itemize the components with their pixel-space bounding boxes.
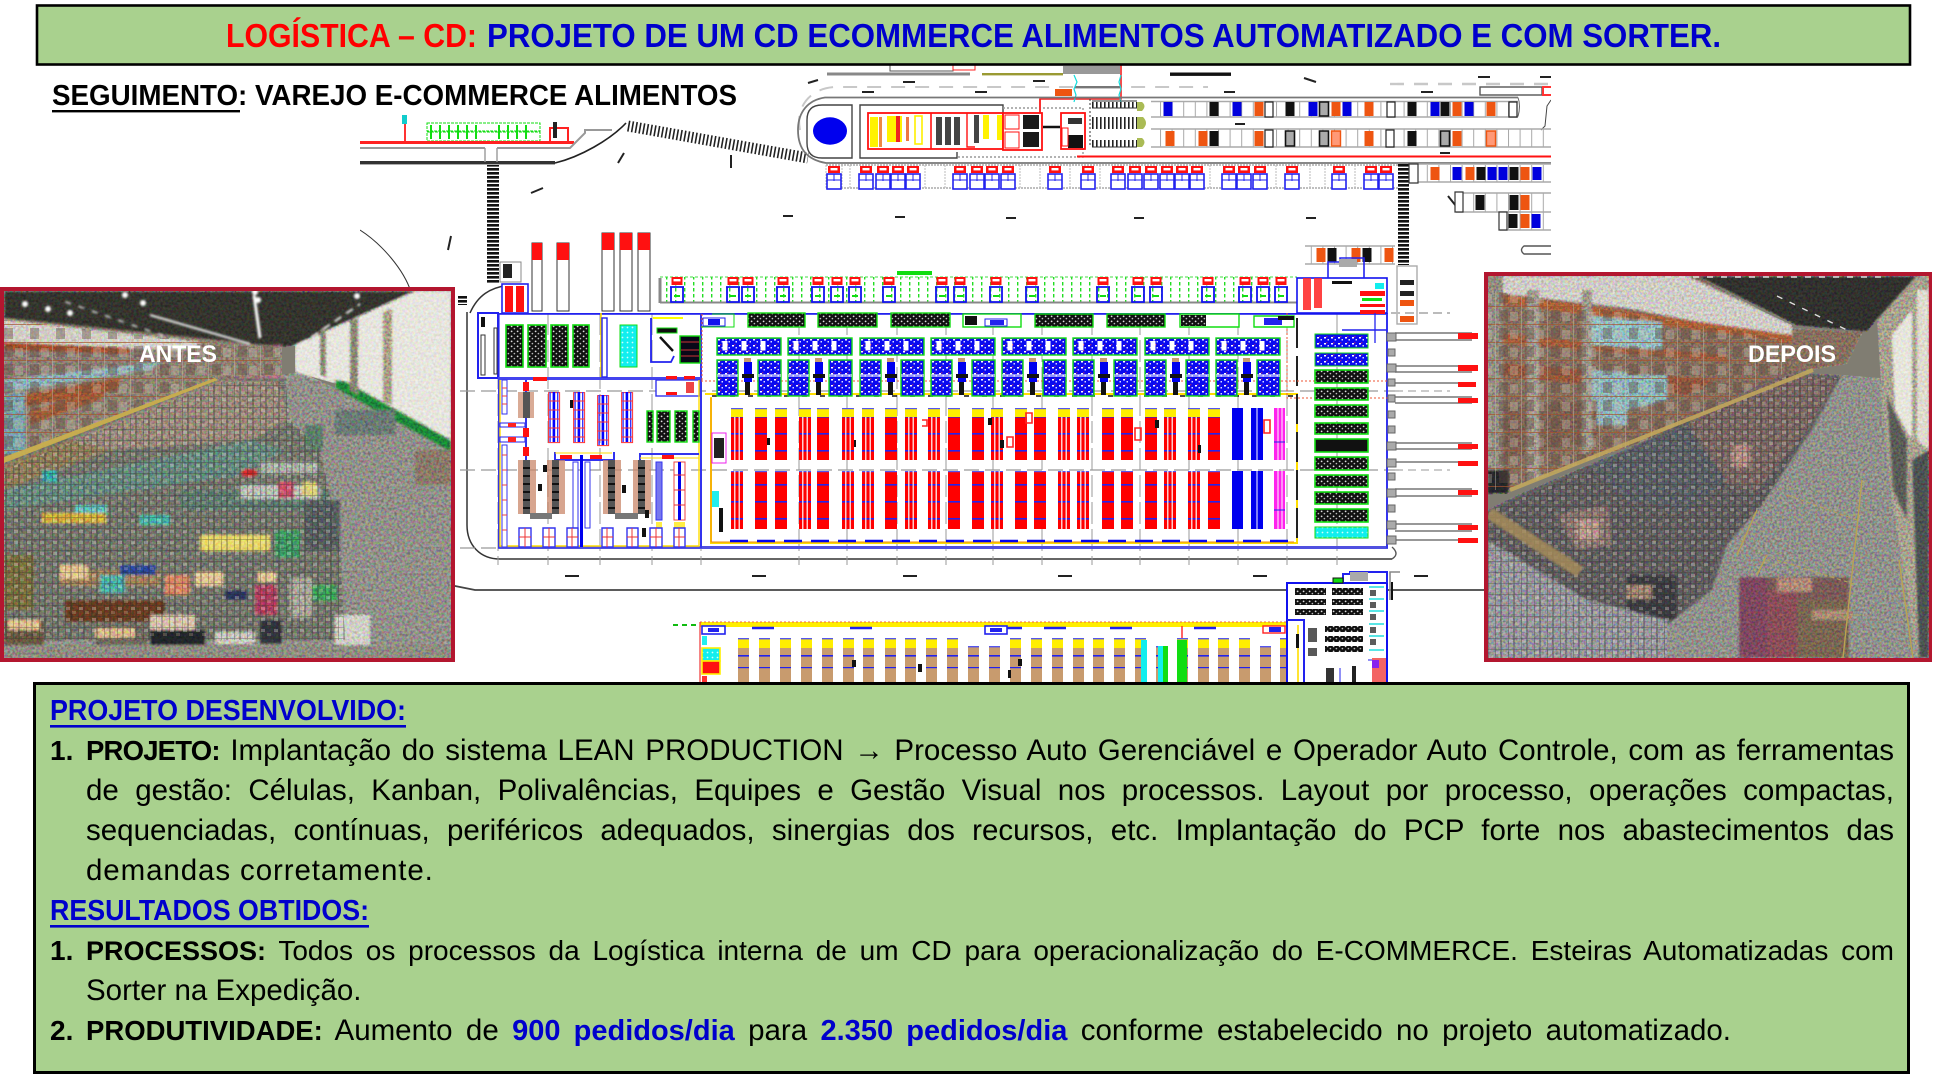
- magenta pallet rack: [1274, 408, 1285, 529]
- photo: depois (after): [1486, 274, 1930, 660]
- label: antes: ANTES: [139, 341, 217, 368]
- title banner: PROJETO DE UM CD ECOMMERCE ALIMENTOS AUTOMATIZADO E COM SORTER.: [487, 17, 1721, 54]
- lower dock units with red caps: [826, 165, 1398, 189]
- blue pallet racks: [1232, 408, 1263, 529]
- item: projeto line 3: sequenciadas, contínuas, periféricos adequados, sinergias dos recursos, etc. Implantação do PCP forte nos abastecimentos das: [86, 814, 1894, 847]
- inbound dock doors above building: [458, 233, 650, 313]
- lower warehouse racks: [673, 622, 1291, 683]
- yellow lane: [4, 378, 218, 463]
- racks: [1487, 276, 1863, 496]
- floor plan drawing: [360, 65, 1552, 683]
- carts mass: [4, 378, 345, 640]
- top-left storage section: [498, 313, 701, 396]
- U-shaped sorter cells: [518, 460, 651, 519]
- pink stock at back: [218, 343, 284, 380]
- blue flow racks row B: [717, 358, 1280, 396]
- structural grid lines: [460, 391, 1400, 548]
- title banner: [37, 6, 1910, 64]
- ceiling: [1697, 276, 1917, 332]
- ceiling: [4, 291, 415, 348]
- item: processos line 1: PROCESSOS: Todos os processos da Logística interna de um CD para operacionalização do E-COMMERCE. Esteiras Automatizadas com: [86, 935, 1894, 966]
- hatched ramps: [360, 126, 1409, 292]
- list number 1 results: 1.: [50, 935, 73, 966]
- list number 2 results: 2.: [50, 1015, 73, 1046]
- right side dock lanes: [1387, 333, 1478, 544]
- left receiving strip: [360, 115, 626, 164]
- left racks: [4, 318, 282, 458]
- top black storage blocks: [701, 313, 1294, 327]
- segment heading: SEGUIMENTO: VAREJO E-COMMERCE ALIMENTOS: [52, 80, 737, 112]
- upper right office and service block: [1297, 258, 1450, 343]
- rack and cart texture: [4, 320, 280, 458]
- right hand storage blocks: [1315, 334, 1368, 538]
- upper yard and expedition building: [360, 65, 1552, 292]
- green dashed docks with units: [660, 271, 1297, 303]
- yard dashed lane: [799, 65, 1552, 130]
- main building structure: [450, 285, 1490, 590]
- pallets: [1766, 576, 1850, 602]
- item: projeto line 4: demandas corretamente.: [86, 854, 434, 887]
- sorter line block: [868, 113, 1085, 150]
- right parked trucks: [1305, 164, 1551, 264]
- yellow lanes: [1510, 370, 1813, 490]
- floor: [1667, 375, 1923, 658]
- conveyors with green ends: [1092, 101, 1146, 147]
- icon: blue tank circle: [813, 117, 847, 145]
- rack and cart texture: [1487, 290, 1787, 490]
- item: projeto line 2: de gestão: Células, Kanban, Polivalências, Equipes e Gestão Visual nos processos. Layout por processo, operações compactas,: [86, 774, 1894, 807]
- panel: project and results: [33, 682, 1910, 1074]
- blue flow racks row A: [717, 338, 1280, 355]
- list number 1: 1.: [50, 735, 73, 766]
- yard arrows: [448, 77, 1552, 250]
- road arrows: [565, 575, 1428, 577]
- item: processos line 2: Sorter na Expedição.: [86, 974, 362, 1007]
- right wall: [1877, 276, 1929, 658]
- expedition building outline: [798, 98, 1551, 163]
- ceiling lights: [22, 289, 360, 345]
- photo: antes (before): [2, 289, 453, 660]
- floor: [43, 372, 451, 646]
- label: depois: DEPOIS: [1748, 341, 1836, 368]
- item: projeto line 1: PROJETO: Implantação do sistema LEAN PRODUCTION → Processo Auto Gerenciável e Operador Auto Controle, com as ferramentas: [86, 734, 1894, 767]
- red pallet racks: [712, 408, 1285, 532]
- truck dock rows: [1040, 99, 1551, 156]
- lower office block: [1287, 572, 1400, 683]
- back wall and right wall: [295, 291, 451, 445]
- lower-left picking cells and racks: [500, 380, 856, 547]
- title banner: LOGÍSTICA – CD:: [226, 17, 477, 54]
- item: produtividade: PRODUTIVIDADE: Aumento de 900 pedidos/dia para 2.350 pedidos/dia conforme estabelecido no projeto automatizado.: [86, 1014, 1731, 1047]
- carts: [1488, 371, 1842, 625]
